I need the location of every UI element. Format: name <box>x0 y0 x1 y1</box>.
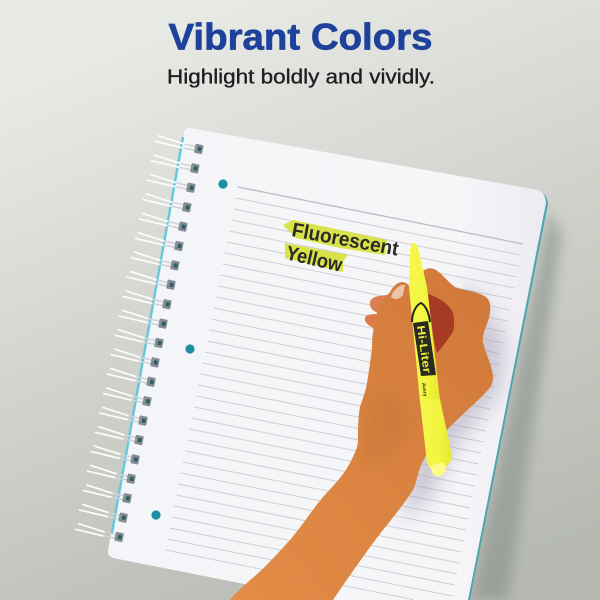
handwritten highlighted text <box>283 219 401 277</box>
upper left fingertip <box>370 295 396 314</box>
highlight swipes <box>283 220 387 255</box>
black label arch <box>412 303 430 322</box>
thumbnail <box>391 285 405 299</box>
punched holes <box>151 179 228 520</box>
pen body <box>409 243 440 402</box>
lower left fingertip <box>365 314 382 329</box>
notebook shadow <box>472 210 562 600</box>
cap end <box>430 462 446 476</box>
palm interior shadow <box>428 294 454 353</box>
handwriting: Fluorescent: Fluorescent <box>290 219 401 261</box>
subtitle: Highlight boldly and vividly. <box>167 66 435 88</box>
paper page <box>108 128 546 600</box>
ruled lines <box>165 187 523 600</box>
hand and forearm <box>230 268 493 600</box>
brand mark: Avery <box>420 382 428 397</box>
title: Vibrant Colors <box>168 16 432 58</box>
hand shadow on page <box>400 280 505 520</box>
notebook <box>74 128 548 600</box>
teal back cover edge <box>440 192 548 600</box>
spiral binding <box>74 135 204 543</box>
label text: Hi-Liter <box>414 325 433 375</box>
forearm and fingers <box>230 268 493 600</box>
pen cap <box>420 399 452 476</box>
blue spine strip <box>112 137 183 533</box>
palm shading <box>362 391 412 466</box>
handwriting: Yellow: Yellow <box>284 242 345 277</box>
highlighter <box>409 243 452 476</box>
black label band <box>413 321 436 376</box>
